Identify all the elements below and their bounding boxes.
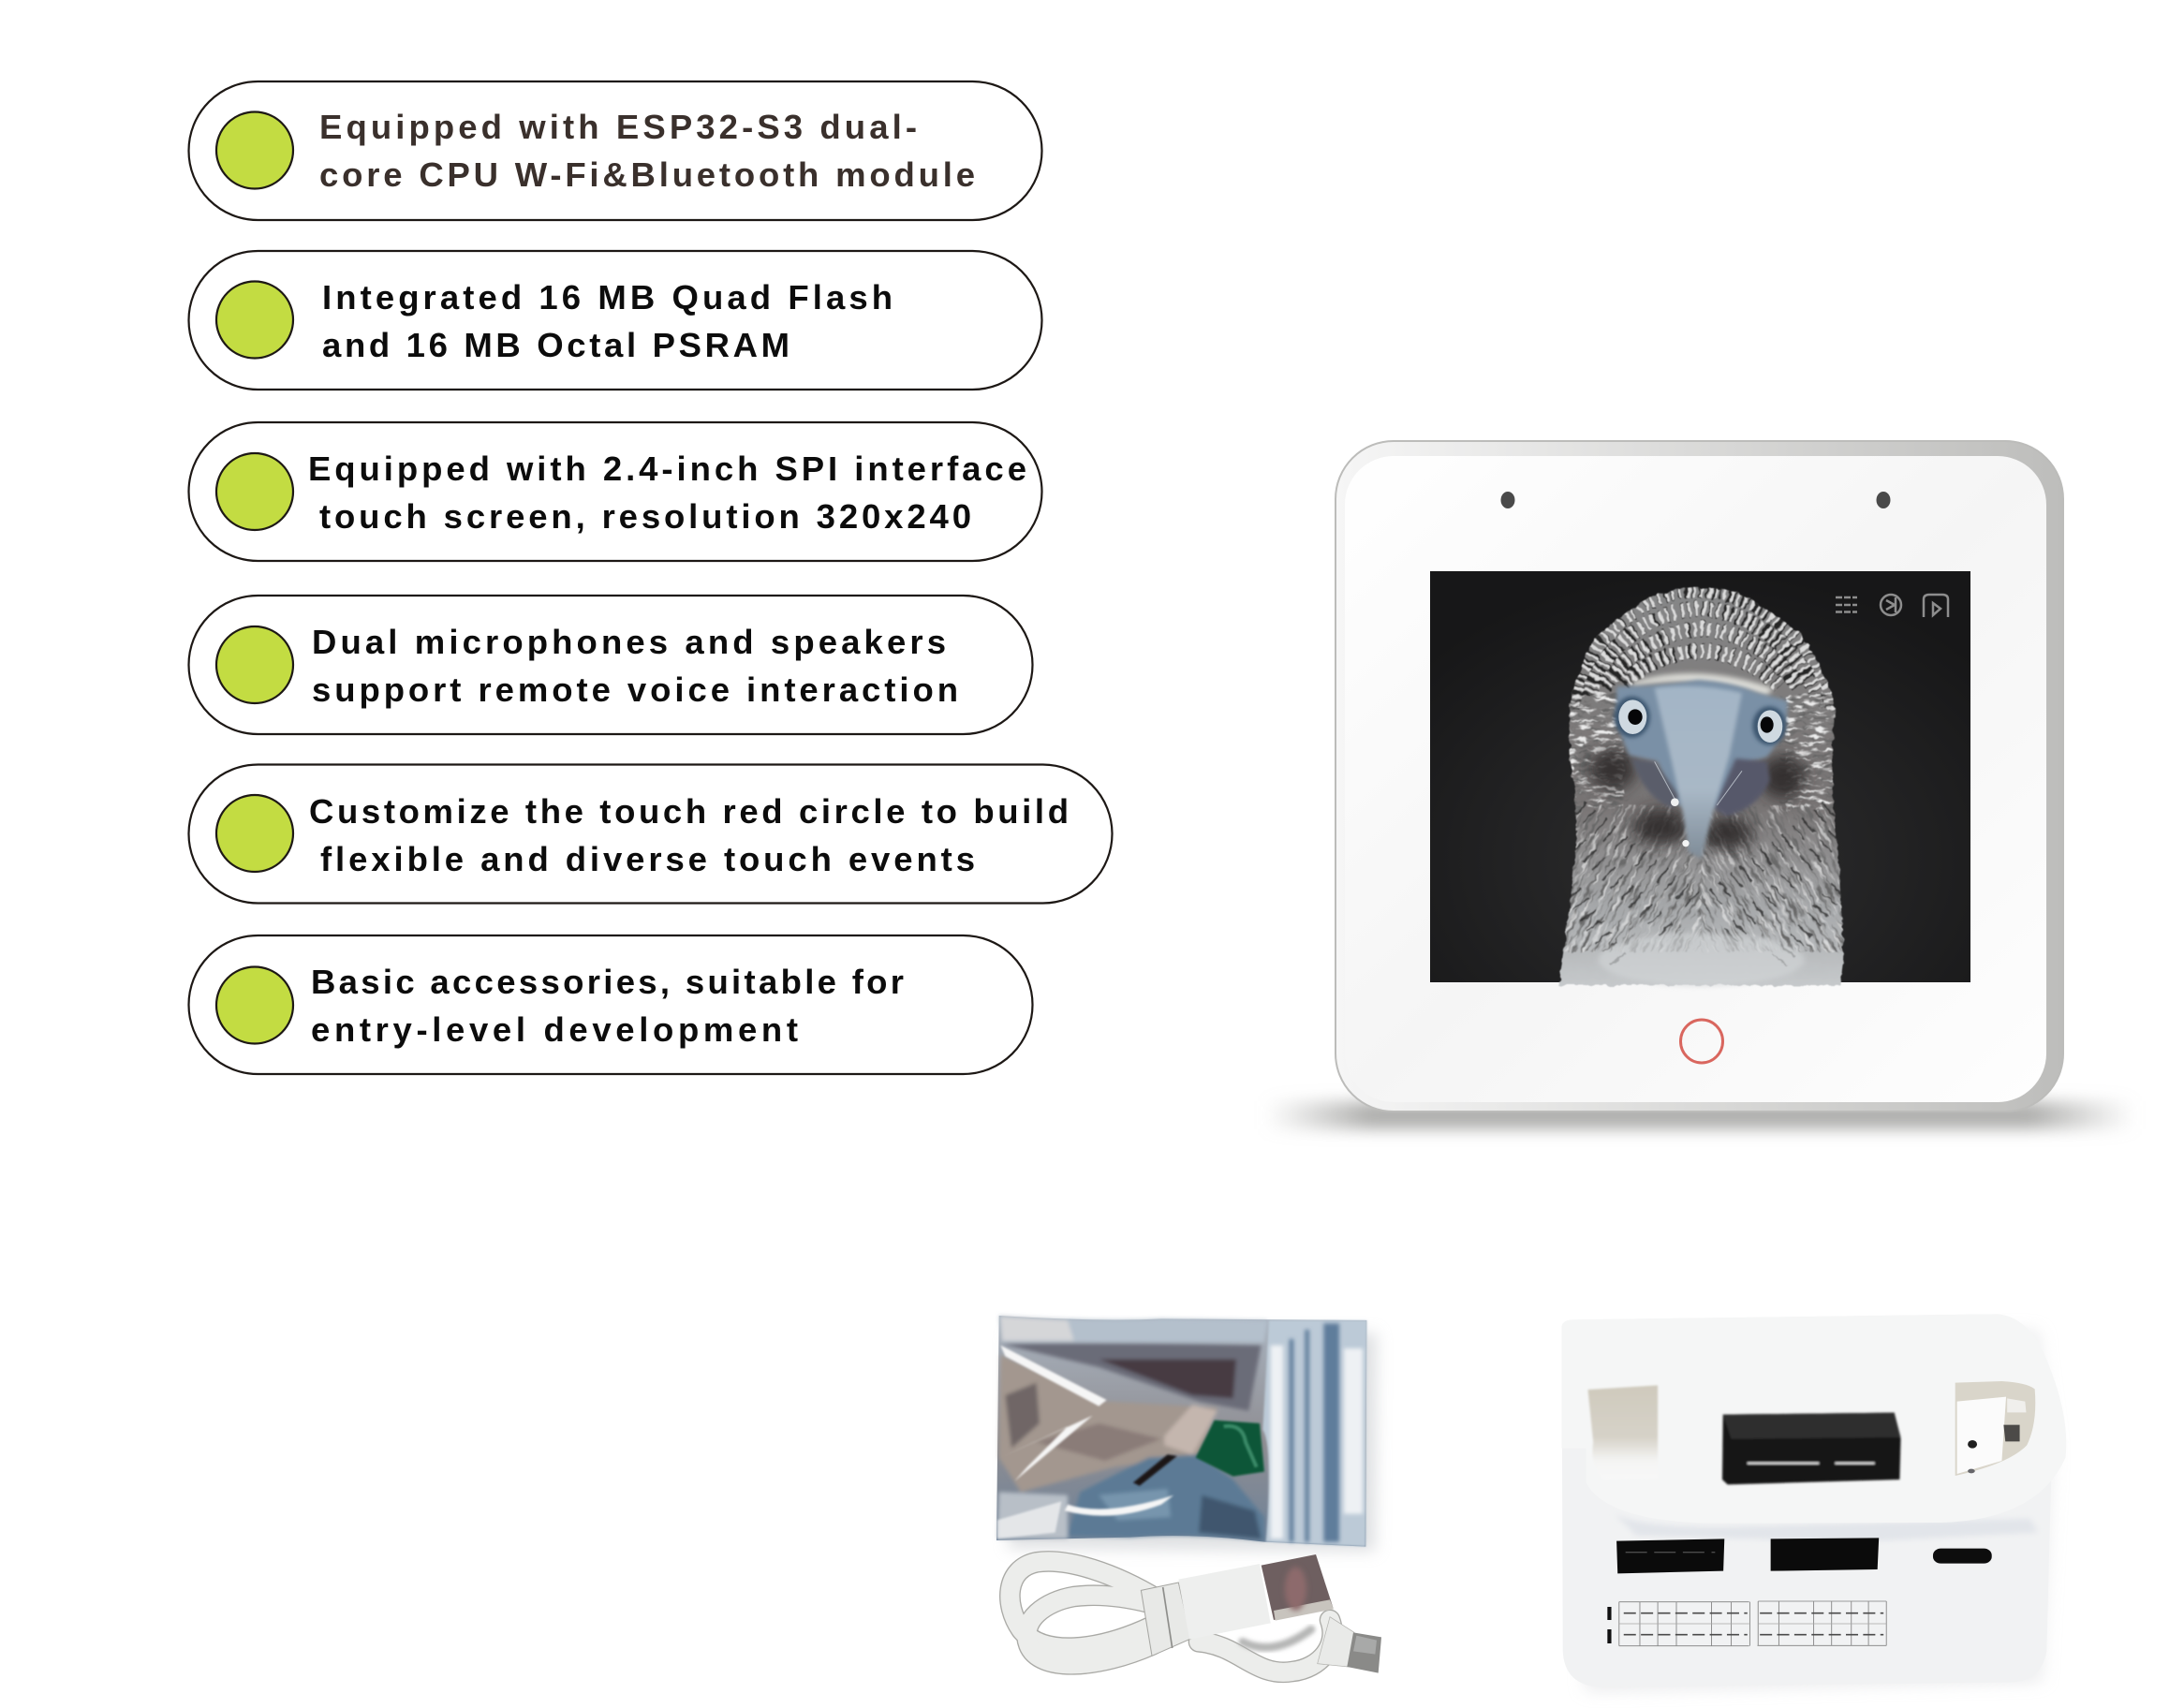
left window bbox=[1587, 1385, 1658, 1480]
feature pill: microphones bbox=[189, 596, 1032, 734]
bullet: accessories bbox=[216, 966, 293, 1043]
black connector bbox=[1722, 1413, 1901, 1484]
screen bbox=[1430, 571, 1970, 982]
text: touch circle: flexible and diverse touch events bbox=[320, 840, 975, 878]
neck feather texture right bbox=[1699, 804, 1845, 953]
lid shadow bbox=[1615, 1514, 2038, 1542]
microphone left bbox=[1500, 492, 1515, 508]
right eye bbox=[1752, 706, 1786, 745]
side feather texture bbox=[1568, 691, 1627, 809]
bag dark fold bbox=[1000, 1343, 1262, 1411]
text: touch circle: Customize the touch red circle to build bbox=[309, 792, 1069, 831]
usb-a plug body bbox=[1178, 1564, 1271, 1640]
device casing bbox=[1335, 441, 2063, 1112]
text: microphones: Dual microphones and speakers bbox=[312, 623, 946, 661]
cable loops bbox=[1010, 1561, 1333, 1672]
bag taupe fold bbox=[999, 1355, 1217, 1492]
text: microphones: support remote voice interaction bbox=[312, 670, 958, 709]
device face bbox=[1345, 456, 2046, 1102]
feature pill: ESP32-S3 CPU bbox=[189, 81, 1041, 220]
touch screen device bbox=[1335, 441, 2063, 1112]
back shadow bbox=[1583, 1330, 2052, 1692]
port left bbox=[1616, 1539, 1724, 1573]
text: touch screen bbox=[308, 449, 1026, 536]
neck feather texture left bbox=[1564, 803, 1703, 953]
back base bbox=[1562, 1314, 2052, 1687]
device back view bbox=[1562, 1314, 2066, 1692]
bird left cheek bbox=[1631, 758, 1679, 808]
microphone right bbox=[1877, 492, 1890, 508]
bird feathers bbox=[1558, 586, 1845, 987]
text: accessories: Basic accessories, suitable for bbox=[311, 963, 904, 1001]
bag folds bbox=[997, 1316, 1267, 1540]
feature pill: accessories bbox=[189, 935, 1032, 1074]
bullet: touch screen bbox=[216, 453, 293, 530]
text: ESP32-S3 bbox=[319, 108, 975, 194]
bag body bbox=[996, 1316, 1366, 1547]
green circuit board bbox=[1196, 1421, 1264, 1477]
bill highlights bbox=[1655, 761, 1742, 847]
zipper strip bbox=[1262, 1320, 1366, 1547]
bag top band bbox=[999, 1316, 1267, 1342]
pin table bbox=[1609, 1601, 1886, 1646]
text: accessories: entry-level development bbox=[311, 1010, 798, 1049]
red touch circle bbox=[1680, 1020, 1723, 1063]
bag highlights bbox=[997, 1346, 1173, 1539]
text: touch screen: touch screen, resolution 320x240 bbox=[319, 497, 971, 536]
text: ESP32-S3: Equipped with ESP32-S3 dual- bbox=[319, 108, 917, 146]
bullet: ESP32-S3 bbox=[216, 112, 293, 189]
text: memory: and 16 MB Octal PSRAM bbox=[322, 326, 789, 364]
usb-c metal bbox=[1347, 1632, 1381, 1673]
port center bbox=[1771, 1538, 1879, 1571]
text: accessories bbox=[311, 963, 904, 1049]
text: touch circle bbox=[309, 792, 1069, 878]
screen icons bbox=[1836, 595, 1948, 617]
bag blue lower fold bbox=[1068, 1454, 1264, 1540]
usb-c boot bbox=[1318, 1617, 1354, 1667]
bag dark slit bbox=[1133, 1454, 1177, 1486]
text: touch screen: Equipped with 2.4-inch SPI interface bbox=[308, 449, 1026, 488]
feature pill: touch screen bbox=[189, 422, 1041, 561]
text: memory: Integrated 16 MB Quad Flash bbox=[322, 278, 893, 317]
back lid bbox=[1562, 1314, 2066, 1524]
device shadow bbox=[1264, 1101, 2135, 1129]
right window bbox=[1955, 1381, 2035, 1476]
bullet: microphones bbox=[216, 626, 293, 703]
bird face mask bbox=[1616, 680, 1787, 812]
bullet: touch circle bbox=[216, 795, 293, 872]
text: memory bbox=[322, 278, 893, 364]
bullet: memory bbox=[216, 281, 293, 358]
cable strap bbox=[1141, 1583, 1191, 1656]
bird beak bbox=[1655, 686, 1742, 859]
usb-c slot bbox=[1933, 1549, 1992, 1564]
text: ESP32-S3: core CPU W-Fi&Bluetooth module bbox=[319, 155, 975, 194]
bird chest highlight bbox=[1599, 934, 1805, 986]
bird dark cheek patches bbox=[1589, 749, 1806, 850]
left eye bbox=[1614, 697, 1650, 738]
usb-a metal bbox=[1262, 1554, 1333, 1620]
text: microphones bbox=[312, 623, 958, 709]
bird brow bbox=[1632, 673, 1773, 696]
bag shadow bbox=[1009, 1333, 1377, 1552]
usb cable bbox=[1010, 1561, 1333, 1672]
feature pill: memory bbox=[189, 251, 1041, 390]
feature pill: touch circle bbox=[189, 764, 1113, 903]
bird photo bbox=[1558, 586, 1845, 987]
anti-static bag bbox=[996, 1316, 1381, 1673]
bird right cheek bbox=[1714, 758, 1770, 817]
